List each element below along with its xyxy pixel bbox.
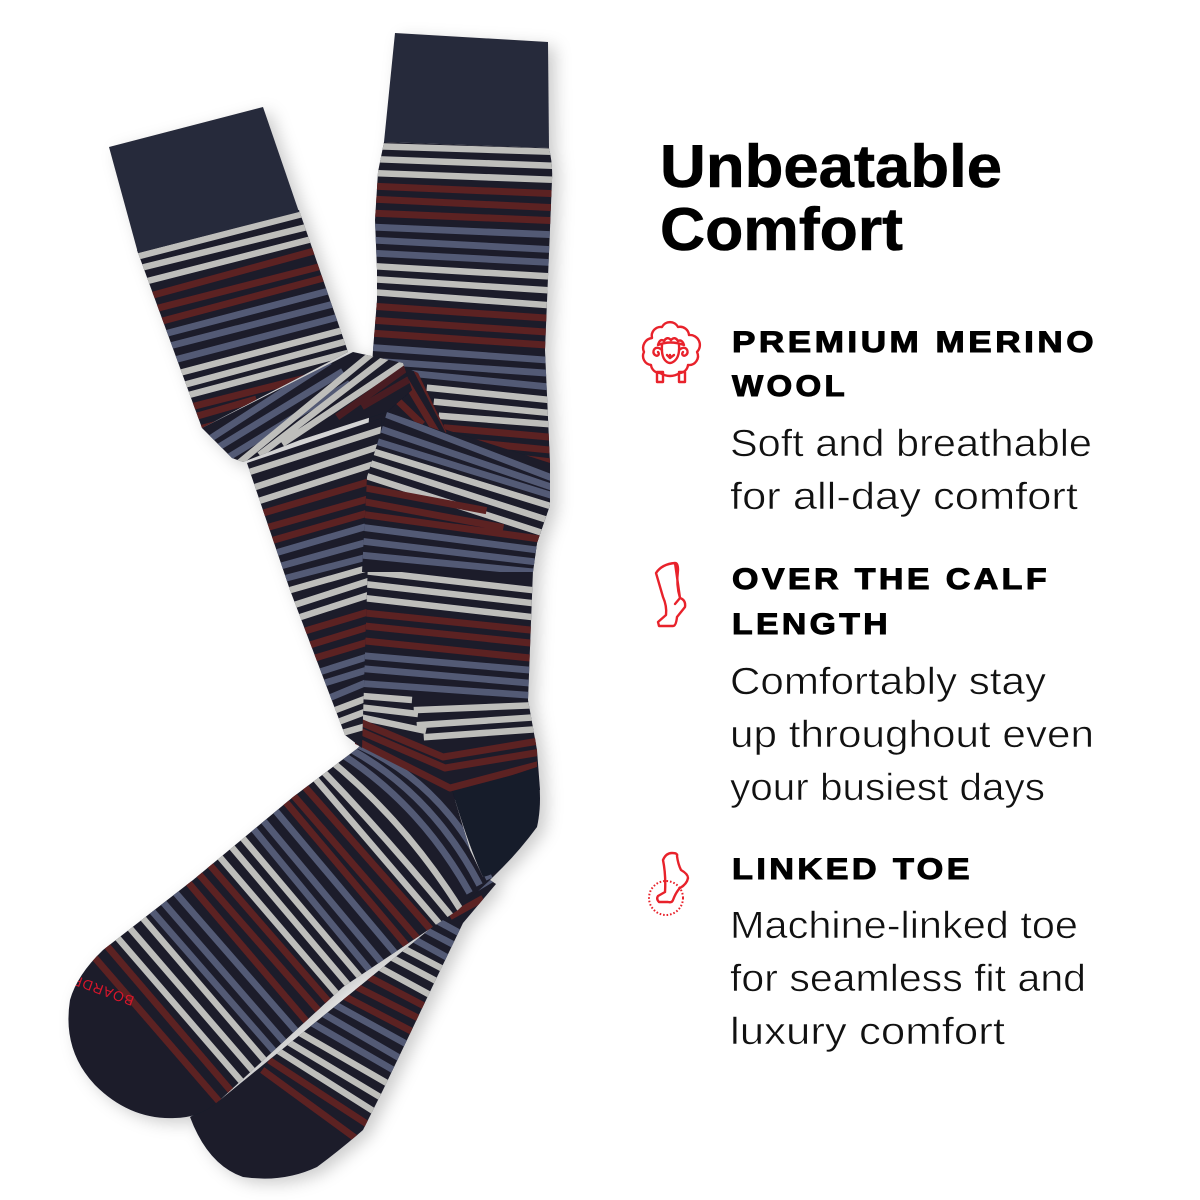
description: up throughout even: [730, 714, 1094, 756]
toe brand text: BOARDROOM: [34, 959, 136, 1009]
ankle chevron stripes: [350, 695, 537, 788]
icon: calf: [656, 563, 685, 626]
heading: OVER THE CALF: [732, 563, 1050, 596]
front sock foot: [68, 746, 503, 1130]
left sock middle section: [247, 422, 382, 748]
folded flap stripes: [200, 348, 415, 466]
right sock cuff: [384, 33, 549, 148]
title: Comfort: [660, 196, 903, 263]
title: [660, 133, 1002, 263]
right sock leg: [350, 130, 560, 810]
heading: [732, 563, 1050, 641]
description: for seamless fit and: [730, 958, 1086, 1000]
icon: sheep: [643, 322, 700, 382]
heading: WOOL: [732, 370, 848, 403]
icon: toe: [649, 853, 688, 915]
description: Comfortably stay: [730, 661, 1046, 703]
title: Unbeatable: [660, 133, 1002, 200]
description: luxury comfort: [730, 1011, 1005, 1053]
description: Soft and breathable: [730, 423, 1092, 465]
heel patch: [452, 767, 540, 877]
feature: premium merino wool: [643, 322, 1097, 518]
description: [730, 905, 1086, 1053]
left sock upper leg: [128, 205, 355, 435]
feature: linked toe: [649, 853, 1086, 1053]
heading: [732, 326, 1097, 403]
description: [730, 423, 1092, 518]
feature: over the calf length: [656, 563, 1094, 809]
description: Machine-linked toe: [730, 905, 1078, 947]
heading: LINKED TOE: [732, 853, 973, 886]
right fold section: [362, 412, 550, 572]
heading: LENGTH: [732, 608, 891, 641]
left sock cuff: [109, 107, 299, 253]
description: for all-day comfort: [730, 476, 1079, 518]
description: [730, 661, 1094, 809]
heading: PREMIUM MERINO: [732, 326, 1097, 359]
description: your busiest days: [730, 767, 1045, 809]
fold red triangle: [387, 369, 446, 432]
sock foot behind: [180, 870, 510, 1190]
pair of striped socks: [34, 33, 560, 1190]
